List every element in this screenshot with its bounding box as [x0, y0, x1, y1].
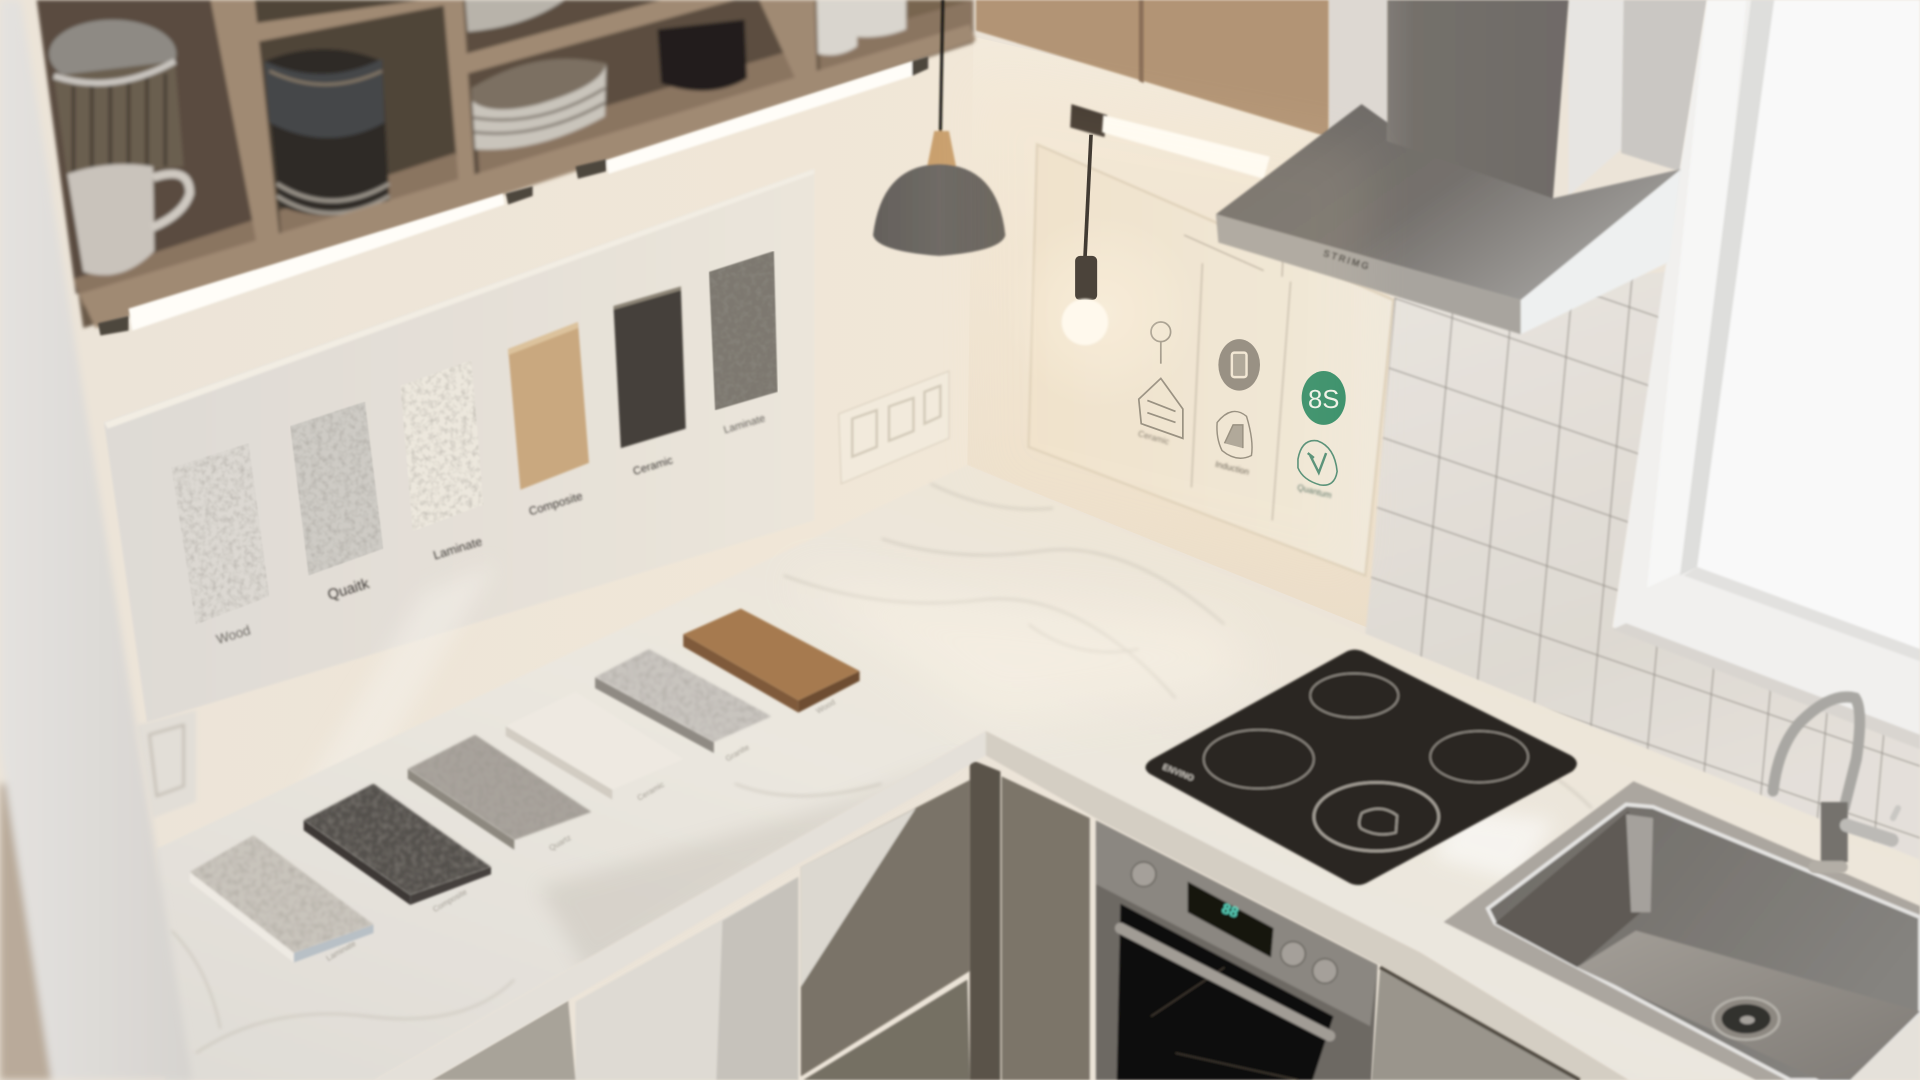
lower right cabinet — [1371, 967, 1580, 1080]
grey sample — [408, 735, 591, 850]
upper plates — [465, 0, 564, 32]
sample 2 — [290, 402, 383, 576]
counter sample captions: Quartz — [548, 833, 573, 853]
icon: green leaf tile — [1298, 441, 1337, 485]
lower left cabinets — [431, 759, 1090, 1080]
marble veins — [171, 484, 1592, 1053]
faucet — [1773, 697, 1898, 867]
sample display panel — [104, 169, 814, 796]
right upper wood cabinet — [976, 0, 1329, 137]
sample 3 — [400, 360, 484, 531]
right wall light and bulb — [1004, 104, 1270, 410]
counter shadow bands — [539, 753, 967, 973]
digital display: 88 — [1219, 901, 1240, 922]
counter front edges — [375, 731, 1629, 1080]
hob rings — [1204, 673, 1528, 851]
digital display — [1188, 882, 1273, 958]
sample labels: Ceramic — [632, 454, 675, 478]
oven — [1096, 820, 1378, 1080]
control knobs — [1131, 862, 1337, 983]
induction hob — [1145, 650, 1577, 885]
tile wall — [1365, 272, 1920, 863]
counter sample captions: Ceramic — [636, 780, 666, 803]
warm light overlay — [973, 73, 1371, 588]
dark stacked bowls — [264, 49, 389, 215]
right info panel — [1029, 144, 1393, 576]
door one — [576, 877, 798, 1080]
marble countertop — [157, 465, 1920, 1080]
under-cabinet light strips — [98, 56, 928, 336]
left foreground pillar — [0, 0, 192, 1080]
light sample — [190, 835, 373, 962]
sample labels: Laminate — [723, 413, 767, 436]
upper open shelves — [37, 0, 976, 328]
icon: green circle: 8S — [1308, 386, 1339, 414]
sample labels: Quaitk — [326, 576, 372, 604]
panel captions: Quantum — [1296, 482, 1333, 500]
lit wall beside hood — [1569, 0, 1707, 196]
sample 5 dark — [613, 287, 686, 448]
lower left outlet — [137, 710, 196, 818]
panel captions — [1137, 428, 1333, 500]
sample 4 wood — [508, 322, 589, 490]
counter sample captions: Laminate — [325, 939, 358, 963]
icon: grey circle — [1218, 339, 1260, 391]
sample labels: Wood — [214, 622, 252, 647]
door two — [801, 780, 970, 1076]
cream sample — [506, 692, 683, 800]
shelf boards — [80, 0, 976, 328]
basket — [49, 20, 184, 179]
panel divider lines — [1184, 235, 1291, 520]
stainless sink — [1444, 781, 1920, 1080]
counter sample captions — [325, 698, 837, 963]
hood brand: STRIMG — [1322, 248, 1372, 273]
shelf floors — [73, 0, 973, 306]
wood sample — [683, 609, 860, 713]
sample labels — [214, 413, 767, 647]
counter sample captions: Wood — [814, 698, 837, 716]
range hood — [1216, 0, 1681, 334]
sink left wall — [1495, 811, 1641, 967]
counter sample captions: Composite — [431, 887, 469, 914]
icon: pin and box — [1139, 322, 1183, 438]
counter sample captions: Granite — [724, 742, 751, 763]
pendant lamp — [873, 0, 1005, 256]
icon: green circle — [1302, 371, 1346, 425]
sample labels: Composite — [527, 490, 584, 518]
panel captions: Induction — [1214, 459, 1251, 477]
oven door — [1117, 904, 1333, 1080]
sink floor — [1577, 931, 1920, 1080]
dark sample — [304, 784, 491, 905]
white plate stack — [471, 59, 606, 150]
white cups — [817, 0, 906, 55]
sink drain — [1713, 998, 1779, 1040]
oven handle — [1120, 928, 1330, 1036]
door three — [803, 980, 970, 1080]
door four — [1002, 776, 1090, 1080]
sample 1 — [171, 443, 269, 624]
white mug — [67, 164, 190, 275]
window — [1613, 0, 1920, 749]
dark pot — [658, 20, 747, 91]
sample 6 stone — [709, 251, 778, 410]
icon: outlined tile — [1217, 411, 1252, 458]
wall switch plate — [839, 371, 949, 484]
speckled sample — [595, 649, 771, 753]
sample labels: Laminate — [431, 534, 484, 562]
panel captions: Ceramic — [1137, 428, 1171, 447]
counter samples — [190, 609, 860, 963]
hob brand: ENVINO — [1161, 762, 1196, 783]
